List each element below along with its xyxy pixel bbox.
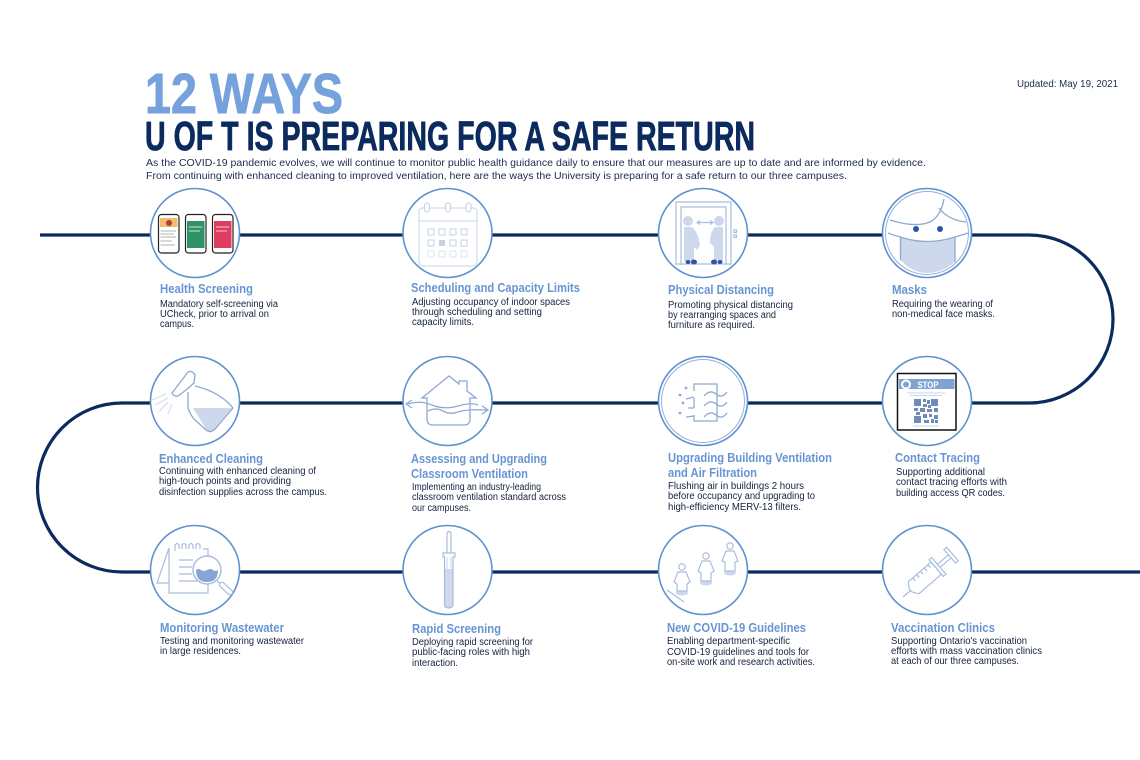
description (891, 636, 1042, 667)
panel: assessing and upgrading classroom ventilation (403, 356, 566, 514)
heading: Classroom Ventilation (411, 466, 528, 481)
description (412, 637, 534, 669)
heading: Vaccination Clinics (891, 620, 995, 635)
description: Testing and monitoring wastewater (160, 636, 305, 647)
icon: three phones (158, 214, 233, 253)
update date: Updated: May 19, 2021 (1017, 79, 1118, 90)
description: contact tracing efforts with (896, 477, 1007, 488)
introduction text (146, 157, 926, 182)
heading: Upgrading Building Ventilation (668, 450, 832, 465)
description (160, 299, 279, 330)
panel: vaccination clinics (882, 526, 1042, 667)
icon: two people in elevator (676, 202, 736, 265)
icon: syringe (896, 546, 960, 605)
panel: masks (882, 188, 995, 320)
description: at each of our three campuses. (891, 656, 1019, 667)
description: on-site work and research activities. (667, 657, 815, 668)
icon: spray bottle (152, 371, 233, 432)
description: Promoting physical distancing (668, 300, 793, 311)
icon: test tube with swab (443, 532, 455, 608)
icon: air filter (662, 360, 744, 442)
description (668, 300, 793, 331)
description (412, 482, 566, 514)
panel: scheduling and capacity limits (403, 188, 580, 328)
icon: calendar (419, 203, 477, 266)
description: Supporting Ontario's vaccination (891, 636, 1027, 647)
title: 12 WAYS (145, 62, 343, 126)
heading: Rapid Screening (412, 621, 501, 636)
description (159, 466, 327, 498)
heading: New COVID-19 Guidelines (667, 620, 806, 635)
heading: Health Screening (160, 281, 253, 296)
panel: enhanced cleaning (150, 356, 327, 498)
description: before occupancy and upgrading to (668, 491, 816, 502)
heading: Scheduling and Capacity Limits (411, 280, 580, 295)
description: classroom ventilation standard across (412, 492, 566, 503)
description (667, 636, 815, 668)
heading (668, 450, 832, 480)
description: by rearranging spaces and (668, 310, 776, 321)
introduction text: As the COVID-19 pandemic evolves, we will continue to monitor public health guidance daily to ensure that our measures are up to date and are informed by evidence. (146, 157, 926, 169)
description: efforts with mass vaccination clinics (891, 646, 1042, 657)
description (892, 299, 995, 320)
heading: Enhanced Cleaning (159, 451, 263, 466)
title: U OF T IS PREPARING FOR A SAFE RETURN (145, 113, 755, 159)
description: Enabling department-specific (667, 636, 790, 647)
title (145, 62, 755, 159)
description: UCheck, prior to arrival on (160, 309, 269, 320)
introduction text: From continuing with enhanced cleaning to improved ventilation, here are the ways the University is preparing for a safe return to our three campuses. (146, 170, 847, 182)
icon: notepad and magnifier (157, 544, 234, 596)
heading: Masks (892, 282, 927, 297)
description: public-facing roles with high (412, 647, 530, 658)
panel: new covid-19 guidelines (658, 526, 815, 668)
heading: Assessing and Upgrading (411, 451, 547, 466)
panel: health screening (150, 188, 279, 330)
description: Requiring the wearing of (892, 299, 993, 310)
description: furniture as required. (668, 320, 755, 331)
description: our campuses. (412, 503, 471, 514)
description: interaction. (412, 658, 458, 669)
description (412, 297, 570, 328)
description: Mandatory self-screening via (160, 299, 279, 310)
description (160, 636, 305, 657)
description (668, 481, 816, 513)
description: capacity limits. (412, 317, 474, 328)
icon: masked face (886, 192, 968, 274)
description: Implementing an industry-leading (412, 482, 541, 493)
description: building access QR codes. (896, 488, 1005, 499)
winding path connecting the steps (38, 235, 1140, 572)
icon: stop sign with QR code (898, 374, 956, 430)
description: non-medical face masks. (892, 309, 995, 320)
icon: house with air flow (406, 376, 488, 425)
heading: Monitoring Wastewater (160, 620, 284, 635)
panel: monitoring wastewater (150, 526, 305, 657)
description (896, 467, 1007, 499)
panel: contact tracing (882, 356, 1007, 499)
description: through scheduling and setting (412, 307, 542, 318)
heading: Physical Distancing (668, 282, 774, 297)
description: Supporting additional (896, 467, 985, 478)
description: COVID-19 guidelines and tools for (667, 647, 810, 658)
description: disinfection supplies across the campus. (159, 487, 327, 498)
panel: upgrading building ventilation and air filtration (658, 356, 832, 513)
icon: stop sign with QR code: STOP (918, 380, 938, 390)
icon: spaced people on markers (667, 543, 738, 602)
heading (411, 451, 547, 481)
description: Flushing air in buildings 2 hours (668, 481, 804, 492)
description: Continuing with enhanced cleaning of (159, 466, 316, 477)
description: Adjusting occupancy of indoor spaces (412, 297, 570, 308)
heading: and Air Filtration (668, 465, 757, 480)
heading: Contact Tracing (895, 450, 980, 465)
description: high-touch points and providing (159, 476, 291, 487)
panel: rapid screening (403, 526, 534, 669)
description: campus. (160, 319, 194, 330)
description: high-efficiency MERV-13 filters. (668, 502, 801, 513)
panel: physical distancing (658, 188, 793, 331)
description: Deploying rapid screening for (412, 637, 534, 648)
description: in large residences. (160, 646, 241, 657)
